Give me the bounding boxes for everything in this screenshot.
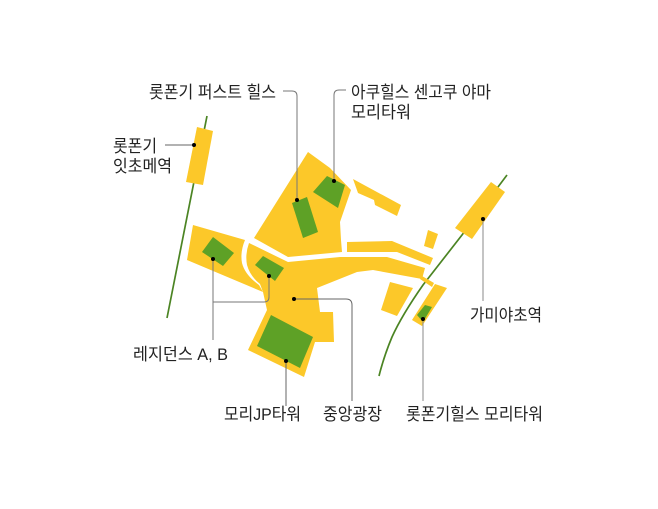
rail line: left (167, 116, 207, 318)
label: Ark Hills Sengokuyama Mori Tower: 아쿠힐스 센고쿠 야마 (351, 83, 491, 102)
block: north-east strip (353, 179, 401, 216)
leader: first hills (283, 91, 299, 202)
building: Roppongi Hills Mori Tower (417, 305, 432, 322)
label: Ark Hills Sengokuyama Mori Tower: 모리타워 (351, 103, 411, 122)
building: residence B (255, 256, 284, 281)
label: Ark Hills Sengokuyama Mori Tower (351, 83, 491, 122)
station: Kamiyacho (455, 182, 505, 239)
leader: Roppongi Hills Mori Tower (421, 317, 425, 401)
block: residence (187, 225, 263, 292)
building: Ark Hills Sengokuyama Mori Tower (313, 176, 345, 208)
label: Kamiyacho station: 가미야초역 (470, 306, 542, 325)
leader: Kamiyacho (481, 217, 485, 301)
block: central plaza and JP tower (246, 243, 425, 377)
building: residence A (202, 237, 234, 266)
label: Roppongi 1-chome station: 잇초메역 (113, 157, 172, 176)
block: connector strip (420, 276, 434, 287)
label: central plaza: 중앙광장 (323, 405, 382, 424)
block: small square (424, 230, 438, 249)
block: road strip (347, 241, 433, 265)
leader: Roppongi 1-chome (165, 143, 196, 147)
block: upper complex (254, 152, 351, 257)
building: first hills (292, 197, 318, 238)
block: Roppongi Hills Mori Tower lot (412, 284, 447, 326)
leader: residence A, B (211, 257, 271, 340)
building: Mori JP Tower (257, 315, 313, 368)
leader: central plaza (292, 297, 352, 401)
label: Roppongi 1-chome station: 롯폰기 (113, 137, 157, 156)
leader: Ark Hills (332, 90, 346, 183)
label: Roppongi 1-chome station (113, 137, 172, 176)
label: first hills: 롯폰기 퍼스트 힐스 (149, 83, 276, 102)
rail line: right (379, 175, 507, 376)
block: east lot (381, 282, 413, 316)
station: Roppongi 1-chome (186, 127, 213, 185)
label: Roppongi Hills Mori Tower: 롯폰기힐스 모리타워 (406, 405, 543, 424)
leader: Mori JP Tower (284, 359, 288, 406)
label: residence A, B: 레지던스 A, B (133, 345, 228, 364)
label: Mori JP Tower: 모리JP타워 (224, 405, 301, 424)
